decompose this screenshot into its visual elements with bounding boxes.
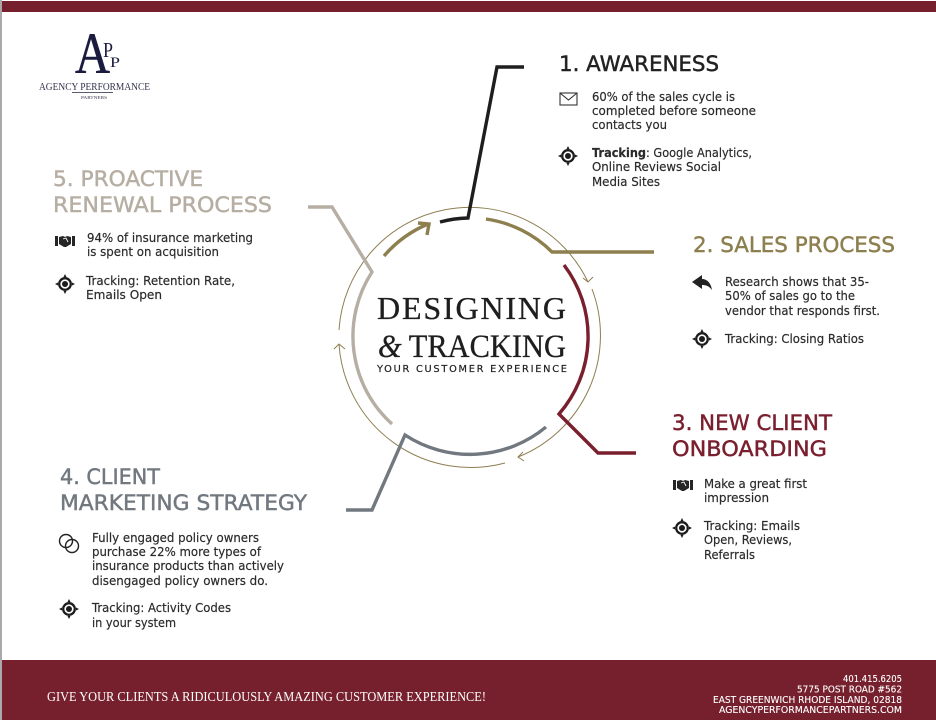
connector: awareness (black) — [440, 67, 524, 222]
text block — [704, 477, 807, 505]
cycle diagram — [308, 67, 654, 510]
tracking text — [85, 274, 235, 302]
text block: purchase 22% more types of — [92, 545, 262, 559]
icon: reply arrow — [692, 275, 712, 290]
panel: 1 awareness — [558, 52, 756, 189]
text block — [592, 90, 756, 132]
gold arrow — [384, 223, 429, 256]
text block: is spent on acquisition — [87, 245, 219, 259]
text block — [725, 275, 880, 318]
tracking text — [592, 146, 752, 189]
center title: DESIGNING — [377, 290, 566, 326]
heading: 5. PROACTIVE — [53, 167, 203, 192]
icon: handshake — [673, 480, 693, 491]
tracking text — [703, 519, 800, 562]
tracking text: Referrals — [704, 548, 755, 562]
logo — [39, 21, 150, 100]
heading: RENEWAL PROCESS — [53, 193, 272, 218]
text block — [92, 531, 284, 588]
connector: client marketing strategy (gray) — [346, 427, 546, 510]
heading: ONBOARDING — [672, 437, 827, 462]
thin cycle ring with arrows — [334, 207, 600, 468]
text block: insurance products than actively — [92, 559, 284, 573]
tracking text: Tracking: Retention Rate, — [85, 274, 235, 288]
footer contact details: EAST GREENWICH RHODE ISLAND, 02818 — [713, 695, 902, 706]
footer contact details: 401.415.6205 — [843, 674, 902, 685]
center title: YOUR CUSTOMER EXPERIENCE — [376, 364, 567, 375]
logo: PARTNERS — [81, 95, 107, 100]
heading: MARKETING STRATEGY — [60, 491, 308, 516]
footer contact details: AGENCYPERFORMANCEPARTNERS.COM — [719, 705, 902, 716]
top bar — [2, 1, 936, 12]
text block: disengaged policy owners do. — [92, 574, 268, 588]
left page edge — [0, 0, 2, 720]
tracking text: Tracking: Emails — [703, 519, 800, 533]
icon: target — [59, 599, 79, 619]
text block: completed before someone — [592, 104, 756, 118]
footer tagline: GIVE YOUR CLIENTS A RIDICULOUSLY AMAZING CUSTOMER EXPERIENCE! — [47, 690, 486, 705]
logo: AGENCY PERFORMANCE — [39, 82, 150, 93]
panel: 5 proactive renewal process — [53, 167, 272, 302]
icon: envelope — [560, 93, 577, 105]
footer band — [2, 660, 936, 720]
text block: vendor that responds first. — [725, 304, 880, 318]
logo: P — [103, 38, 113, 62]
heading: 1. AWARENESS — [559, 52, 719, 77]
icon: target — [55, 274, 75, 294]
heading — [672, 411, 833, 462]
icon: overlapping rings — [60, 534, 78, 552]
connector: proactive renewal (beige) — [308, 207, 392, 424]
tracking text: Media Sites — [592, 175, 660, 189]
logo: P — [110, 55, 120, 71]
panel: 3 new client onboarding — [672, 411, 833, 562]
icon: target — [558, 146, 578, 166]
icon: target — [692, 329, 712, 349]
text block: Make a great first — [704, 477, 807, 491]
panel: 4 client marketing strategy — [59, 465, 308, 630]
text block: Fully engaged policy owners — [92, 531, 259, 545]
tracking text: Tracking: Closing Ratios — [724, 332, 864, 346]
text block: impression — [704, 491, 769, 505]
tracking text: in your system — [92, 616, 176, 630]
footer contact details: 5775 POST ROAD #562 — [797, 684, 902, 696]
panel: 2 sales process — [692, 233, 895, 349]
icon: handshake — [55, 236, 75, 247]
text block: 60% of the sales cycle is — [592, 90, 735, 104]
tracking text: Tracking: Google Analytics, — [592, 146, 752, 160]
tracking text: Emails Open — [86, 288, 162, 302]
footer contact details — [713, 674, 902, 716]
text block: Research shows that 35- — [725, 275, 869, 289]
connector: new client onboarding (red) — [559, 265, 636, 453]
center title — [376, 290, 567, 375]
heading — [60, 465, 308, 516]
center title: & TRACKING — [378, 329, 566, 365]
heading: 3. NEW CLIENT — [672, 411, 833, 436]
text block: 94% of insurance marketing — [87, 231, 253, 245]
tracking text: Online Reviews Social — [592, 160, 721, 174]
tracking text: Open, Reviews, — [704, 533, 792, 547]
text block — [87, 231, 253, 259]
logo: A — [75, 21, 110, 86]
connector: sales process (gold) — [486, 219, 654, 252]
heading: 2. SALES PROCESS — [693, 233, 895, 258]
heading: 4. CLIENT — [60, 465, 161, 490]
heading — [53, 167, 272, 218]
text block: 50% of sales go to the — [725, 289, 855, 303]
text block: contacts you — [592, 118, 667, 132]
tracking text — [91, 601, 231, 630]
tracking text: Tracking: Activity Codes — [91, 601, 231, 615]
icon: target — [672, 518, 692, 538]
